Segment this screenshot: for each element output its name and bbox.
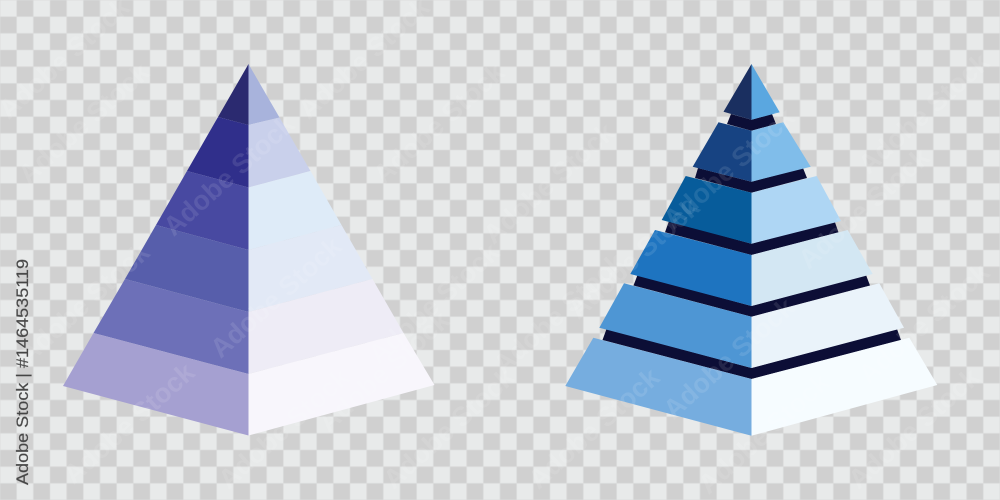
stock watermarks: Adobe Stock (313, 304, 456, 438)
right pyramid left face (565, 64, 752, 436)
stock watermarks: Adobe Stock (488, 246, 631, 380)
stock watermarks: Adobe Stock (658, 101, 801, 235)
right pyramid: blue separated tiers (565, 64, 937, 436)
stock watermarks: Adobe Stock (213, 361, 356, 495)
stock watermarks: Adobe Stock (478, 116, 621, 250)
stock watermarks: Adobe Stock (563, 191, 706, 325)
stock watermarks: Adobe Stock (205, 230, 348, 364)
right pyramid right face (752, 64, 937, 436)
left pyramid: purple solid tiers (63, 64, 434, 436)
stock watermarks: Adobe Stock (13, 236, 156, 370)
stock watermarks: Adobe Stock (378, 361, 521, 495)
stock watermarks: Adobe Stock (658, 291, 801, 425)
stock watermarks: Adobe Stock (793, 141, 936, 275)
stock watermarks: Adobe Stock (853, 256, 996, 390)
stock watermarks: Adobe Stock (523, 361, 666, 495)
stock watermarks: Adobe Stock (363, 236, 506, 370)
dark gaps between tiers (602, 114, 901, 379)
stock watermarks: Adobe Stock (843, 361, 986, 495)
stock watermarks: Adobe Stock (853, 46, 996, 180)
stock watermarks: Adobe Stock (693, 366, 836, 500)
stock watermarks: Adobe Stock (13, 56, 156, 190)
stock watermarks: Adobe Stock (158, 108, 301, 242)
left pyramid right face (248, 64, 434, 436)
stock watermarks: Adobe Stock (58, 356, 201, 490)
stock watermarks: Adobe Stock (368, 56, 511, 190)
stock id caption: Adobe Stock | #1464535119 (13, 259, 32, 485)
left pyramid left face (63, 64, 248, 436)
